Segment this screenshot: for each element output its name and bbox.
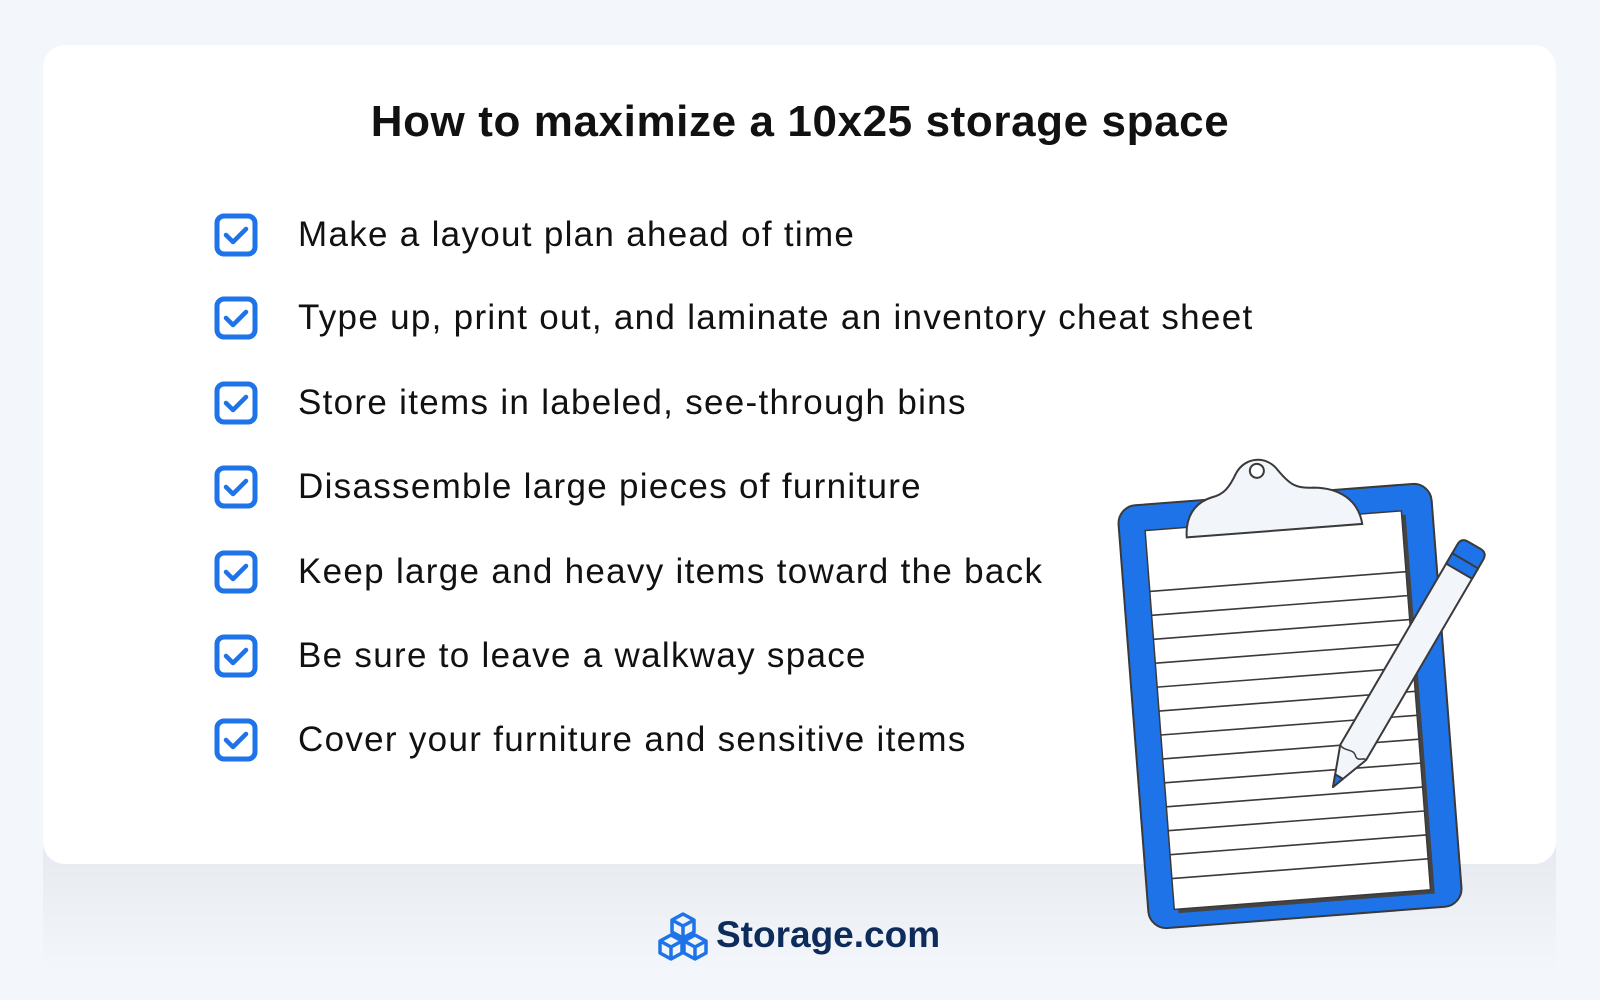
clipboard [1114, 447, 1463, 929]
icon: cubes [658, 912, 708, 961]
item 7: Cover your furniture and sensitive items [298, 720, 967, 759]
item 6: Be sure to leave a walkway space [298, 636, 867, 675]
pencil [1320, 538, 1487, 795]
card panel [43, 45, 1556, 864]
item 1: Make a layout plan ahead of time [298, 215, 855, 254]
item 2: Type up, print out, and laminate an inventory cheat sheet [298, 298, 1254, 337]
item 5: Keep large and heavy items toward the back [298, 552, 1043, 591]
title: How to maximize a 10x25 storage space [371, 97, 1229, 146]
logo [658, 912, 940, 961]
logo text: Storage.com [716, 914, 940, 955]
item 3: Store items in labeled, see-through bins [298, 383, 967, 422]
item 4: Disassemble large pieces of furniture [298, 467, 922, 506]
